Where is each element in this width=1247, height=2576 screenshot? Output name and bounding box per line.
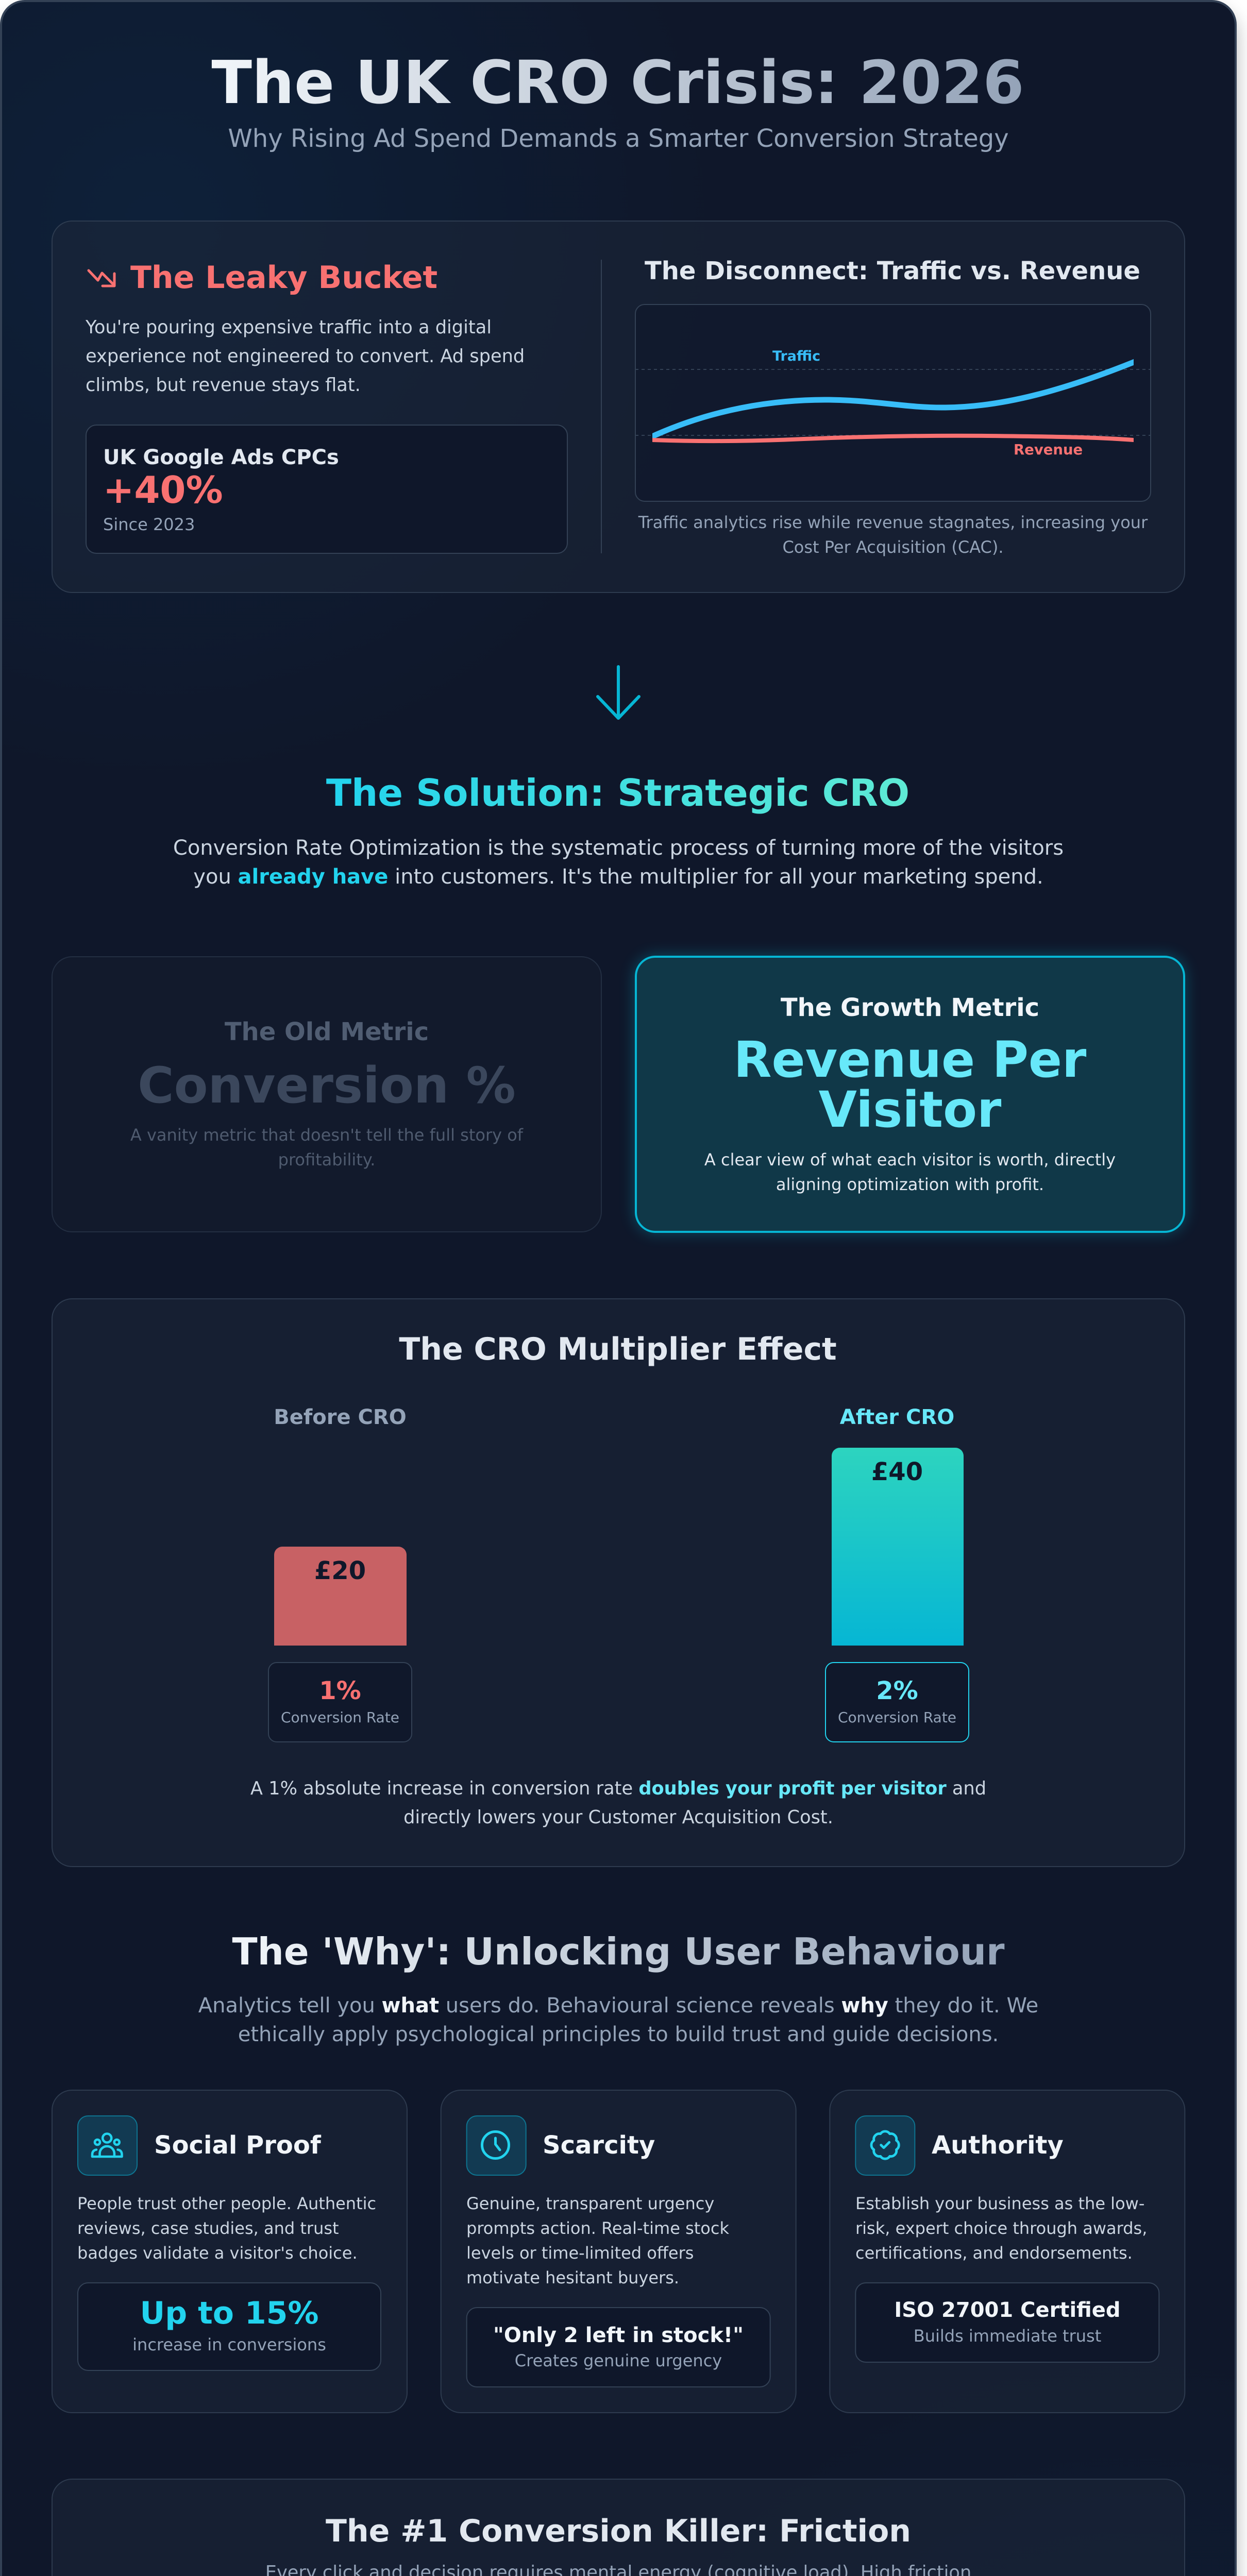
panel: the growth metric: The Growth Metric <box>781 993 1039 1022</box>
stat: UK Google Ads CPCs: UK Google Ads CPCs <box>103 446 339 469</box>
chart caption: Traffic analytics rise while revenue stagnates, increasing your <box>638 513 1148 532</box>
why description: Analytics tell you what users do. Behavioural science reveals why they do it. We <box>198 1994 1038 2018</box>
stat: up to 15%: increase in conversions <box>132 2335 326 2354</box>
stat: ISO 27001 certified <box>855 2283 1159 2362</box>
panel: the growth metric: Revenue Per <box>734 1031 1087 1089</box>
panel: the old metric: profitability. <box>278 1150 375 1170</box>
scarcity description: motivate hesitant buyers. <box>466 2268 679 2287</box>
heading: the solution: The Solution: Strategic CRO <box>326 771 909 815</box>
stat: before conversion rate: Conversion Rate <box>281 1709 399 1726</box>
stat: up to 15% <box>78 2283 381 2370</box>
stat: ISO 27001 certified: Builds immediate trust <box>914 2326 1101 2346</box>
panel: the growth metric: Visitor <box>819 1081 1002 1139</box>
panel: social proof: Social Proof <box>154 2131 322 2160</box>
subtitle: Why Rising Ad Spend Demands a Smarter Conversion Strategy <box>228 124 1009 153</box>
authority description: risk, expert choice through awards, <box>855 2218 1147 2238</box>
social proof description: badges validate a visitor's choice. <box>77 2243 358 2263</box>
stat: before conversion rate: 1% <box>319 1676 361 1705</box>
panel: friction <box>52 2479 1185 2576</box>
scarcity description: prompts action. Real-time stock <box>466 2218 729 2238</box>
social proof description <box>77 2194 376 2263</box>
arrow: down to solution <box>598 667 639 718</box>
bar: after CRO <box>832 1405 964 1646</box>
bar: before CRO <box>274 1405 407 1646</box>
panel: authority <box>830 2090 1185 2413</box>
bar: after CRO: £40 <box>871 1458 923 1486</box>
panel: the leaky bucket and disconnect <box>52 221 1185 592</box>
chart caption <box>638 513 1148 557</box>
heading: multiplier: The CRO Multiplier Effect <box>399 1331 837 1367</box>
panel: the old metric: The Old Metric <box>225 1018 429 1046</box>
panel: the CRO multiplier effect <box>52 1299 1185 1867</box>
authority description <box>855 2194 1147 2263</box>
panel: the growth metric <box>635 956 1185 1233</box>
title: The UK CRO Crisis: 2026 <box>211 48 1024 117</box>
stat: UK Google Ads CPCs <box>86 425 567 553</box>
authority description: Establish your business as the low- <box>855 2194 1144 2213</box>
scarcity description: Genuine, transparent urgency <box>466 2194 714 2213</box>
multiplier explanation <box>250 1778 986 1828</box>
panel: social proof <box>52 2090 407 2413</box>
panel: scarcity <box>441 2090 796 2413</box>
why description: ethically apply psychological principles to build trust and guide decisions. <box>238 2023 999 2046</box>
stat: up to 15%: Up to 15% <box>140 2295 318 2331</box>
multiplier explanation: A 1% absolute increase in conversion rate doubles your profit per visitor and <box>250 1778 986 1799</box>
icon: badge check <box>855 2116 915 2175</box>
line chart: traffic vs revenue: Traffic <box>772 348 820 364</box>
panel: the old metric <box>52 957 601 1232</box>
stat: ISO 27001 certified: ISO 27001 Certified <box>894 2298 1121 2322</box>
leaky bucket description <box>85 317 525 396</box>
stat: after conversion rate: 2% <box>876 1676 918 1705</box>
stat: UK Google Ads CPCs: Since 2023 <box>103 515 195 534</box>
scarcity description <box>466 2194 729 2287</box>
icon: users <box>78 2116 137 2175</box>
panel: the old metric: A vanity metric that doesn't tell the full story of <box>130 1125 524 1145</box>
solution description: you already have into customers. It's the multiplier for all your marketing spend. <box>193 865 1043 889</box>
panel: the old metric: Conversion % <box>138 1057 516 1114</box>
stat: only 2 left in stock <box>467 2308 770 2387</box>
scarcity description: levels or time-limited offers <box>466 2243 694 2263</box>
solution description <box>173 836 1064 889</box>
social proof description: reviews, case studies, and trust <box>77 2218 339 2238</box>
stat: after conversion rate <box>825 1663 969 1742</box>
heading: the leaky bucket: The Leaky Bucket <box>130 260 437 296</box>
social proof description: People trust other people. Authentic <box>77 2194 376 2213</box>
leaky bucket description: You're pouring expensive traffic into a digital <box>85 317 492 338</box>
leaky bucket description: experience not engineered to convert. Ad spend <box>86 346 525 367</box>
line chart: traffic vs revenue: Revenue <box>1014 442 1083 458</box>
panel: authority: Authority <box>932 2131 1064 2160</box>
icon: trending down <box>89 270 114 286</box>
panel: the growth metric: A clear view of what each visitor is worth, directly <box>704 1150 1116 1170</box>
bar: after CRO: After CRO <box>840 1405 954 1429</box>
panel: scarcity: Scarcity <box>543 2131 655 2160</box>
stat: before conversion rate <box>268 1663 412 1742</box>
heading: the disconnect: The Disconnect: Traffic vs. Revenue <box>645 257 1140 285</box>
why description <box>198 1994 1038 2046</box>
heading: friction: The #1 Conversion Killer: Friction <box>326 2513 911 2549</box>
bar: before CRO: £20 <box>314 1556 366 1585</box>
authority description: certifications, and endorsements. <box>855 2243 1133 2263</box>
leaky bucket description: climbs, but revenue stays flat. <box>86 375 361 396</box>
line chart: traffic vs revenue <box>635 304 1151 501</box>
stat: only 2 left in stock: "Only 2 left in stock!" <box>493 2324 744 2347</box>
chart caption: Cost Per Acquisition (CAC). <box>782 537 1004 557</box>
heading: the why: The 'Why': Unlocking User Behaviour <box>232 1930 1005 1973</box>
stat: only 2 left in stock: Creates genuine urgency <box>515 2351 722 2370</box>
multiplier explanation: directly lowers your Customer Acquisition Cost. <box>403 1807 833 1828</box>
solution description: Conversion Rate Optimization is the systematic process of turning more of the visitors <box>173 836 1064 860</box>
stat: UK Google Ads CPCs: +40% <box>103 468 223 512</box>
panel: the growth metric: aligning optimization with profit. <box>776 1175 1044 1194</box>
stat: after conversion rate: Conversion Rate <box>838 1709 956 1726</box>
icon: clock <box>467 2116 526 2175</box>
bar: before CRO: Before CRO <box>274 1405 407 1429</box>
